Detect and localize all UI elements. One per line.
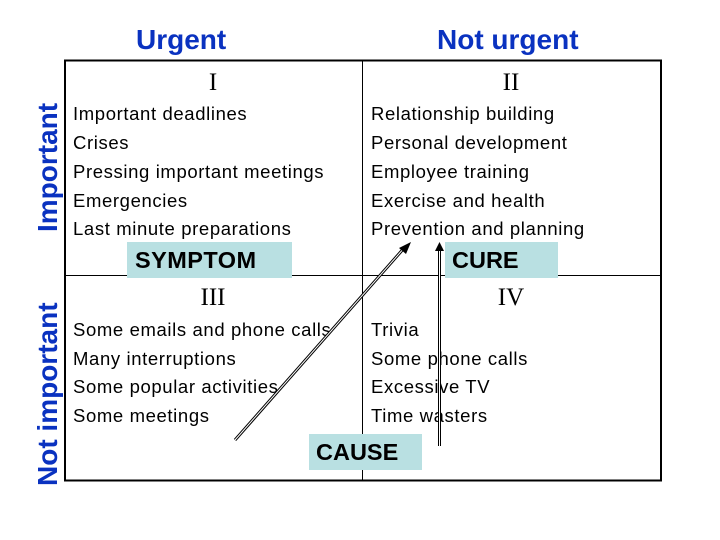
quadrant IV: Time wasters [371, 405, 488, 426]
quadrant I: Crises [73, 132, 129, 153]
quadrant II: Relationship building [371, 103, 555, 124]
heading: Important: Important [32, 103, 63, 232]
quadrant I: Last minute preparations [73, 218, 292, 239]
quadrant I [73, 69, 324, 239]
matrix grid [65, 60, 661, 481]
quadrant III: Some emails and phone calls [73, 319, 331, 340]
quadrant III: Some popular activities [73, 376, 279, 397]
label: CURE: CURE [452, 247, 519, 273]
label: CURE [445, 242, 558, 278]
quadrant II: Prevention and planning [371, 218, 585, 239]
quadrant I: Emergencies [73, 190, 188, 211]
quadrant II: Personal development [371, 132, 568, 153]
quadrant IV: Trivia [371, 319, 419, 340]
quadrant III [73, 284, 331, 426]
quadrant II: Exercise and health [371, 190, 545, 211]
quadrant III: III [201, 284, 225, 311]
label: SYMPTOM: SYMPTOM [135, 247, 257, 273]
heading: Urgent: Urgent [136, 24, 226, 55]
quadrant III: Many interruptions [73, 348, 236, 369]
quadrant I: Pressing important meetings [73, 161, 324, 182]
label: SYMPTOM [127, 242, 292, 278]
quadrant II: Employee training [371, 161, 530, 182]
arrow: cause to prevention, vertical [435, 242, 444, 446]
quadrant II: II [503, 69, 519, 96]
quadrant I: Important deadlines [73, 103, 247, 124]
arrow: cause to prevention, diagonal [235, 242, 411, 440]
quadrant IV: Some phone calls [371, 348, 528, 369]
quadrant IV: Excessive TV [371, 376, 490, 397]
quadrant I: I [209, 69, 217, 96]
label: CAUSE: CAUSE [316, 439, 398, 465]
quadrant IV [371, 284, 528, 426]
quadrant III: Some meetings [73, 405, 210, 426]
quadrant II [371, 69, 585, 239]
heading: Not important: Not important [32, 302, 63, 486]
quadrant IV: IV [498, 284, 524, 311]
heading: Not urgent: Not urgent [437, 24, 579, 55]
label: CAUSE [309, 434, 422, 470]
